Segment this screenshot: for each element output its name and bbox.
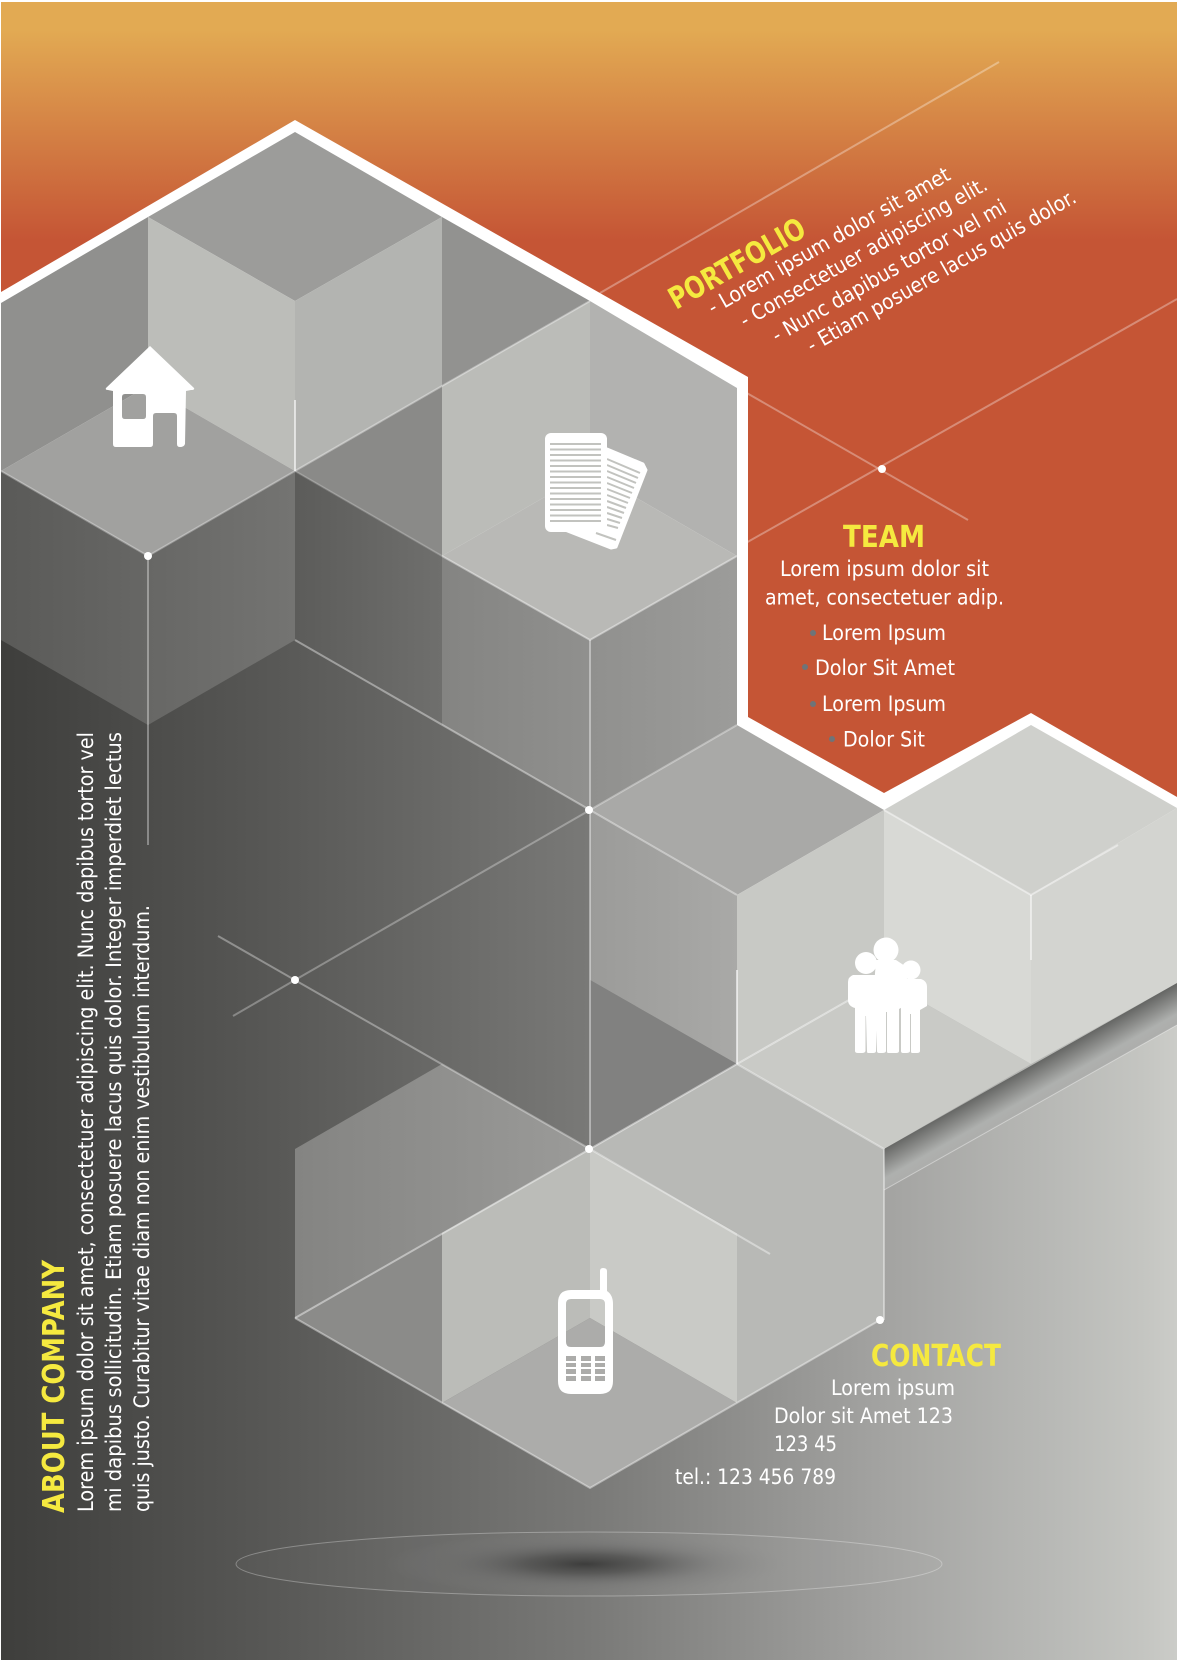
text block: team: Lorem ipsum dolor sit xyxy=(780,557,989,581)
text block: team: TEAM xyxy=(843,520,925,555)
panel: page fold xyxy=(884,983,1177,1190)
text block: contact: CONTACT xyxy=(871,1339,1001,1374)
text block: team: Lorem Ipsum xyxy=(822,621,946,645)
text block: about company: mi dapibus sollicitudin. Etiam posuere lacus quis dolor. Integer imperdiet lectus xyxy=(102,732,126,1512)
background: orange sky xyxy=(1,2,1177,822)
text block: team xyxy=(765,520,1004,752)
text block: team: amet, consectetuer adip. xyxy=(765,586,1004,610)
text block: about company: ABOUT COMPANY xyxy=(37,1259,72,1513)
text block: about company: Lorem ipsum dolor sit amet, consectetuer adipiscing elit. Nunc dapibus tortor vel xyxy=(74,732,98,1512)
ground shadow ellipse xyxy=(236,1532,942,1596)
text block: about company: quis justo. Curabitur vitae diam non enim vestibulum interdum. xyxy=(130,905,154,1512)
text block: contact: 123 45 xyxy=(774,1432,837,1456)
text block: portfolio: - Lorem ipsum dolor sit amet xyxy=(704,162,954,319)
white hexagon outline xyxy=(1,120,1177,900)
icon: documents xyxy=(545,433,646,548)
text block: contact: Dolor sit Amet 123 xyxy=(774,1404,953,1428)
text block: contact xyxy=(675,1339,1001,1489)
text block: contact: Lorem ipsum xyxy=(831,1376,955,1400)
icon: mobile phone xyxy=(558,1268,613,1394)
text block: portfolio: - Consectetuer adipiscing elit. xyxy=(736,172,992,332)
background: grey floor xyxy=(1,640,1177,1660)
icon: house xyxy=(106,346,194,447)
text block: team: Dolor Sit xyxy=(843,728,925,752)
panel: middle cube faces xyxy=(590,725,1177,1149)
text block: portfolio: - Nunc dapibus tortor vel mi xyxy=(768,195,1011,347)
text block: about company xyxy=(37,732,154,1513)
text block: portfolio: PORTFOLIO xyxy=(663,211,812,317)
icon: people xyxy=(848,938,927,1053)
text block: team: Lorem Ipsum xyxy=(822,692,946,716)
panel: bottom cube faces xyxy=(295,1064,884,1488)
wireframe lines xyxy=(1,301,1177,1488)
text block: team: Dolor Sit Amet xyxy=(815,656,955,680)
junction dots xyxy=(144,465,886,1324)
text block: contact: tel.: 123 456 789 xyxy=(675,1465,836,1489)
text block: portfolio xyxy=(663,162,1080,357)
panel: top cube faces xyxy=(1,132,737,810)
decorative thin lines on orange xyxy=(600,62,1177,548)
text block: portfolio: - Etiam posuere lacus quis dolor. xyxy=(803,185,1080,357)
